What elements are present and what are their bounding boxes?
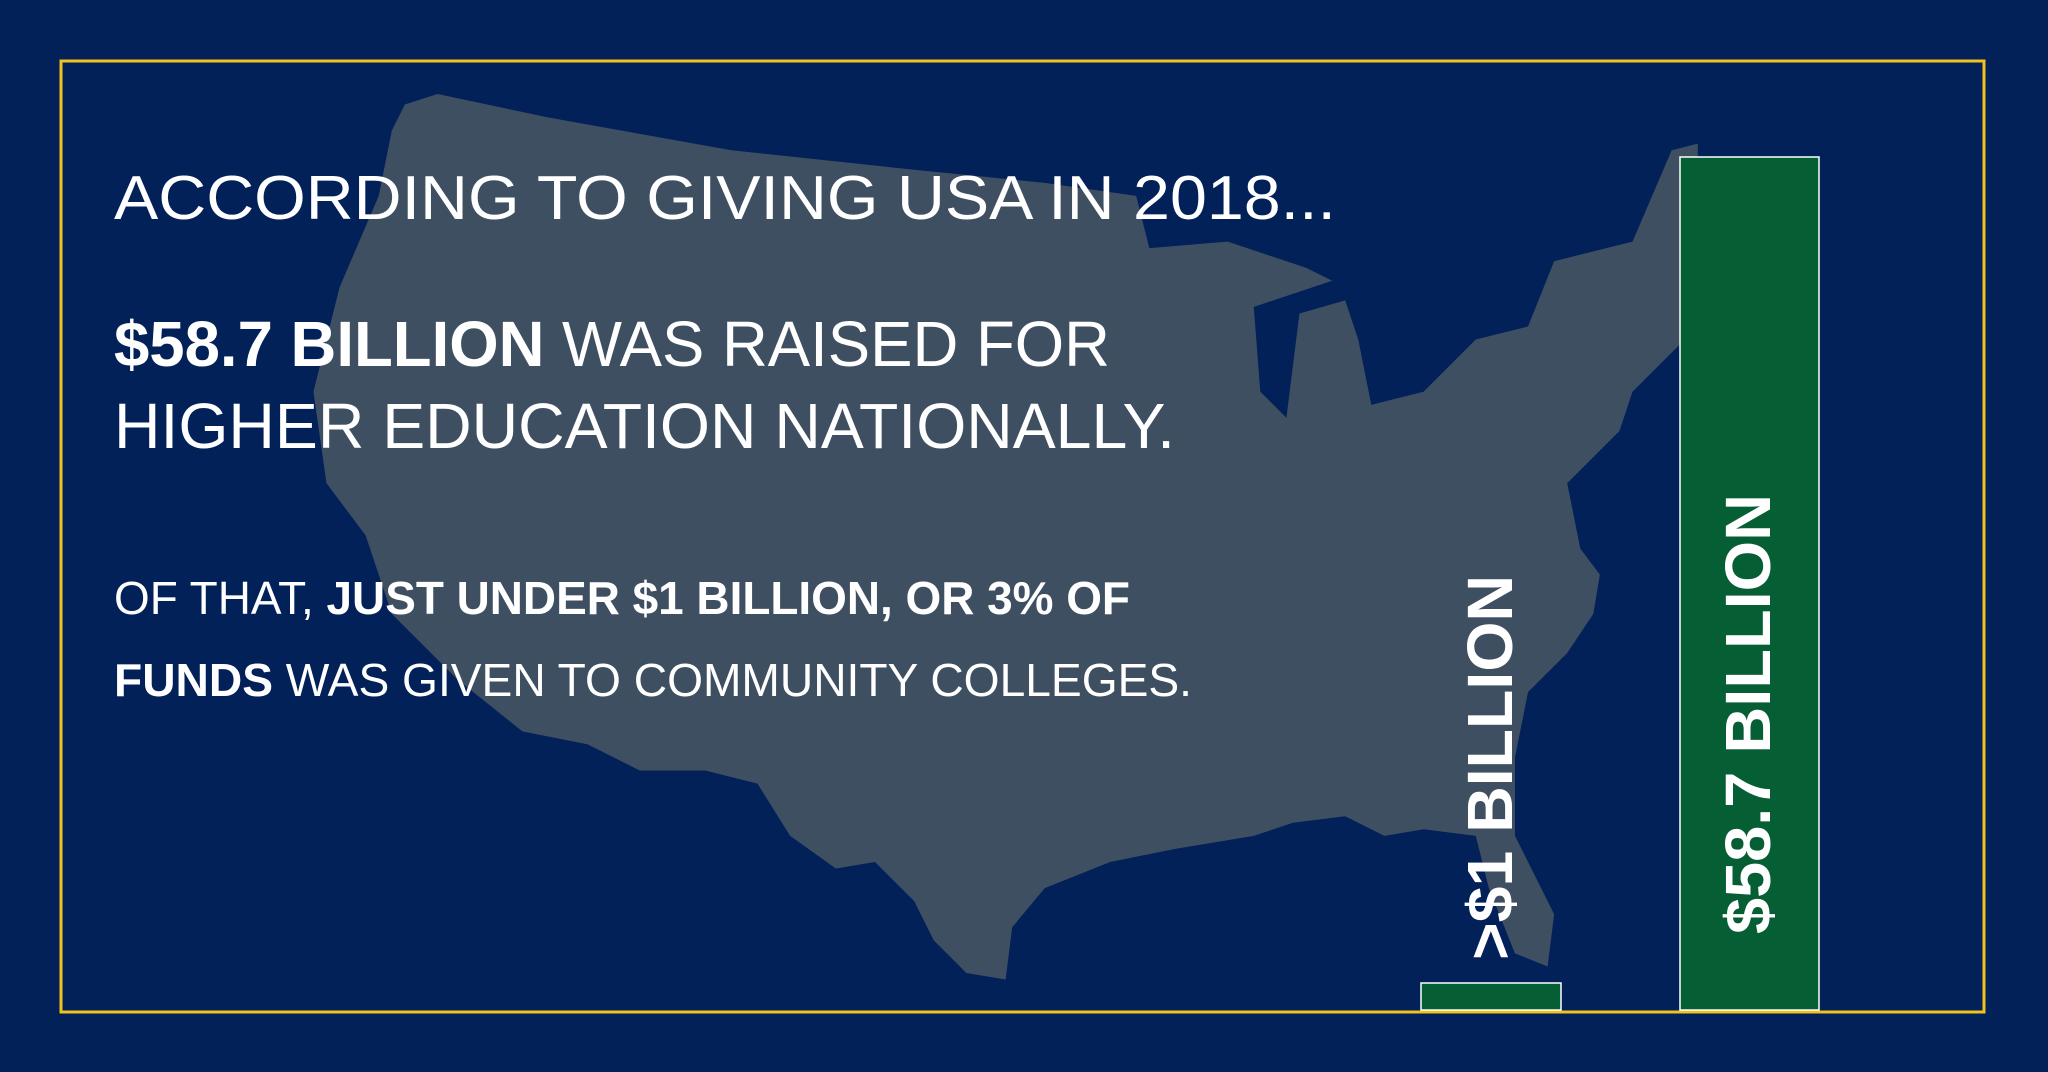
bar chart	[1421, 157, 1819, 1010]
text block: community colleges	[114, 572, 1192, 706]
label: >$1 billion: >$1 BILLION	[1454, 575, 1526, 960]
text block: community colleges: OF THAT, JUST UNDER $1 BILLION, OR 3% OF	[114, 572, 1130, 624]
text block: community colleges: FUNDS WAS GIVEN TO COMMUNITY COLLEGES.	[114, 654, 1192, 706]
bar: total	[1680, 157, 1819, 1010]
map: US silhouette	[313, 94, 1698, 980]
text block: headline stat	[114, 308, 1175, 462]
bar: community colleges	[1421, 983, 1561, 1010]
label: $58.7 billion: $58.7 BILLION	[1712, 494, 1784, 934]
text block: headline stat: HIGHER EDUCATION NATIONALLY.	[114, 390, 1175, 462]
text block: headline stat: $58.7 BILLION WAS RAISED FOR	[114, 308, 1110, 380]
title: ACCORDING TO GIVING USA IN 2018...	[114, 164, 1336, 233]
